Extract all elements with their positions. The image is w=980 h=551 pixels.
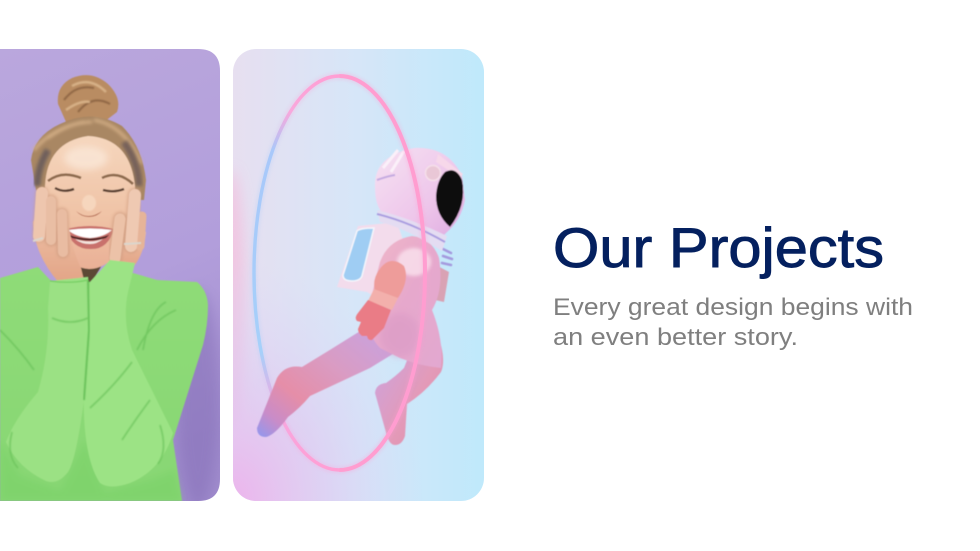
nose — [76, 195, 102, 217]
hair — [31, 75, 146, 200]
cast shadow beside sweater — [176, 290, 220, 510]
figure: astronaut — [257, 148, 465, 445]
eyebrows — [48, 175, 133, 184]
panel: portrait photo of smiling woman — [0, 49, 220, 510]
backpack blue panel — [343, 228, 374, 281]
front leg — [257, 322, 396, 437]
sweater cuffs and sleeves — [6, 260, 173, 486]
helmet — [375, 148, 465, 251]
ear disc — [426, 166, 440, 180]
backpack frame — [337, 222, 403, 300]
neon ring: front half — [340, 76, 425, 470]
subtitle text: Every great design begins with — [553, 294, 913, 321]
neon ring: back half — [254, 76, 340, 470]
sweater body — [0, 267, 208, 501]
rear leg — [374, 346, 444, 446]
neck — [80, 266, 102, 282]
smile — [66, 226, 114, 249]
panel: astronaut through neon ring — [217, 49, 484, 501]
face — [45, 136, 135, 269]
title: Our Projects — [553, 216, 884, 279]
left hand — [33, 193, 85, 284]
sweater folds — [0, 302, 176, 468]
collar — [377, 210, 447, 251]
shading between the arms — [0, 451, 184, 501]
arm and glove — [356, 261, 406, 340]
gradient backdrop — [233, 49, 484, 501]
figure: woman — [0, 75, 208, 501]
lavender backdrop — [0, 49, 220, 501]
subtitle text: an even better story. — [553, 324, 798, 351]
closed eyes — [55, 188, 124, 191]
visor — [436, 170, 463, 227]
rear pack and fins — [436, 248, 454, 302]
torso — [368, 236, 442, 368]
subtitle text — [553, 294, 913, 351]
right hand — [108, 195, 146, 266]
